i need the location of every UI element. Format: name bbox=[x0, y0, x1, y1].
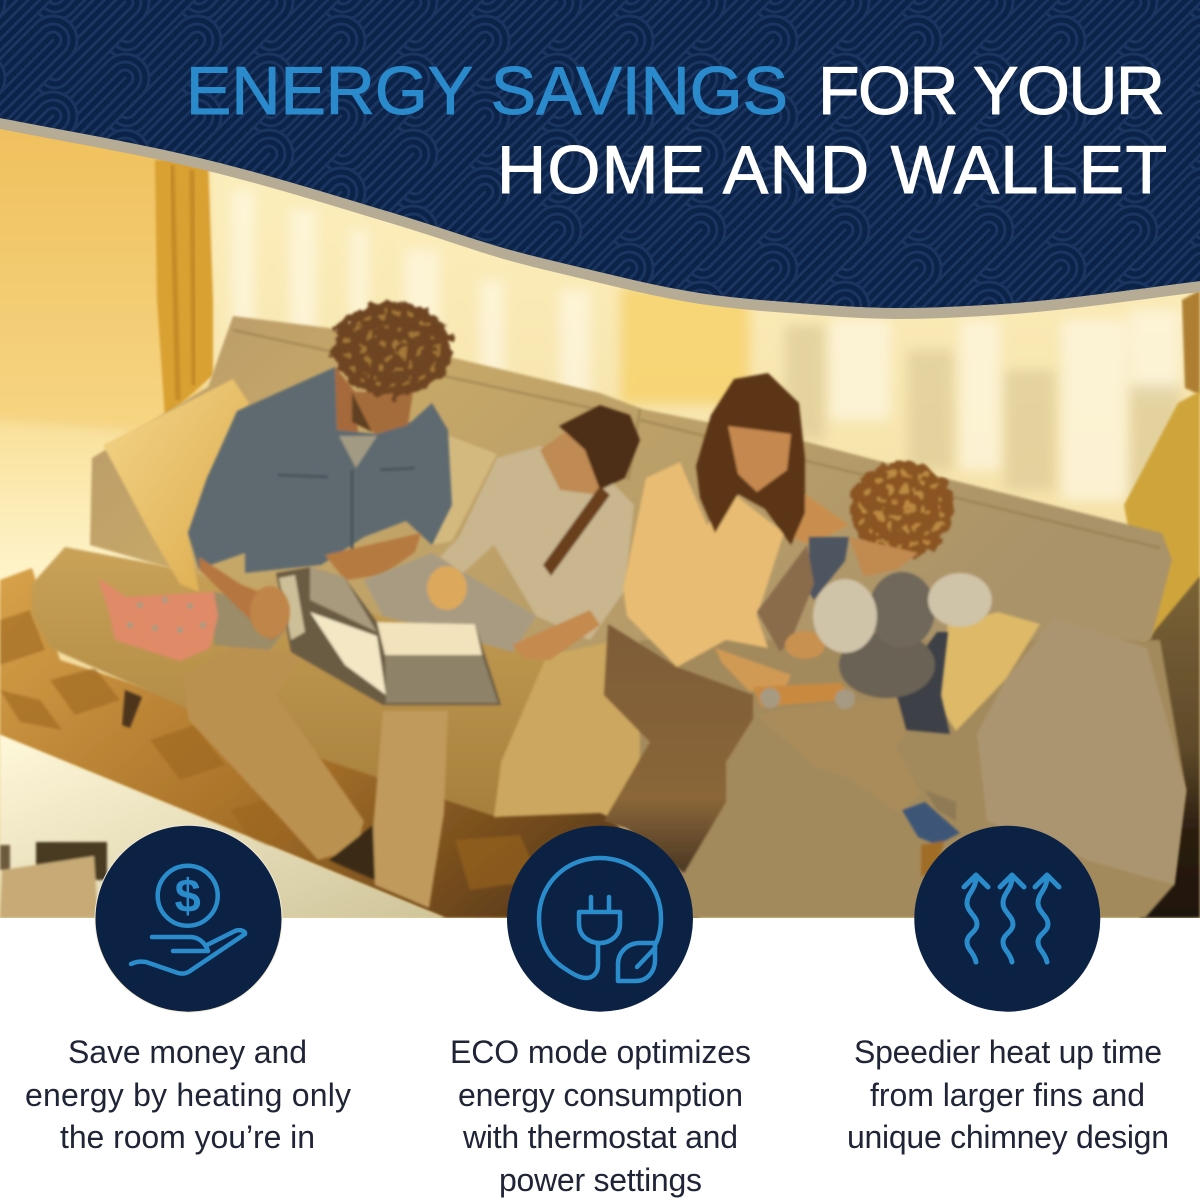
curly hair bbox=[332, 302, 452, 396]
text: speedier heat up bbox=[847, 1034, 1169, 1155]
boy's hand bbox=[785, 631, 825, 659]
girl's legs bbox=[364, 553, 536, 652]
hand bbox=[715, 648, 791, 691]
right brown and gold curtains bbox=[1182, 290, 1200, 395]
jeans bbox=[604, 624, 753, 873]
tan trousers bbox=[757, 699, 921, 813]
woman bbox=[604, 373, 849, 873]
text: ECO mode: with thermostat and bbox=[462, 1119, 738, 1155]
text: ECO mode: ECO mode optimizes bbox=[450, 1034, 751, 1070]
sofa leg bbox=[122, 690, 142, 728]
forearms and hands bbox=[199, 557, 295, 640]
pink sock bbox=[98, 578, 218, 661]
text: ECO mode: energy consumption bbox=[458, 1077, 743, 1113]
text: save money: the room you’re in bbox=[60, 1119, 315, 1155]
text: save money: Save money and bbox=[68, 1034, 307, 1070]
boy with toy koala bbox=[753, 461, 992, 877]
icon: plug with leaf bbox=[507, 826, 693, 1012]
checker floor bbox=[0, 568, 700, 918]
text: ECO mode: power settings bbox=[499, 1162, 702, 1198]
icon: rising heat arrows bbox=[914, 826, 1100, 1012]
boy's curly hair bbox=[850, 461, 954, 557]
koala body bbox=[839, 632, 935, 698]
pillow behind girl bbox=[432, 434, 497, 545]
socks and slippers bbox=[902, 802, 960, 845]
text: save money: energy by heating only bbox=[25, 1077, 351, 1113]
header banner: beige wave border bbox=[0, 0, 1200, 319]
man's shoe bbox=[329, 825, 375, 880]
blouse bbox=[623, 462, 784, 667]
girl's hair and braid bbox=[559, 405, 640, 490]
man bbox=[98, 302, 452, 908]
right sofa seat bbox=[640, 640, 1186, 918]
text: speedier heat up: from larger fins and bbox=[870, 1077, 1145, 1113]
grey trouser knee bbox=[214, 592, 300, 650]
pillow right bbox=[937, 612, 1040, 731]
pillow left bbox=[103, 379, 249, 592]
open book bbox=[276, 567, 501, 705]
jacket bbox=[809, 537, 849, 600]
right patterned fabric and dark corner bbox=[1140, 576, 1200, 918]
title: ENERGY SAVINGS bbox=[186, 53, 788, 129]
denim shirt bbox=[188, 367, 452, 573]
koala ears bbox=[813, 579, 877, 653]
sofa back bbox=[90, 316, 1172, 660]
icon: hand holding coin: $ bbox=[175, 869, 201, 922]
middle sofa cushion bbox=[494, 640, 690, 830]
girl's hands bbox=[427, 566, 467, 610]
white lower panel bbox=[0, 918, 1200, 1200]
white rug lower left bbox=[0, 735, 445, 918]
man's hand on book bbox=[250, 586, 290, 638]
photo background: wall and sheer curtains bbox=[0, 100, 1200, 930]
boy's face bbox=[849, 537, 918, 577]
man's neck bbox=[335, 367, 358, 432]
title bbox=[186, 53, 1167, 208]
sofa back seams bbox=[233, 330, 1160, 548]
books on rug bbox=[0, 842, 107, 918]
right sofa arm cushion bbox=[977, 618, 1186, 885]
toy car bbox=[753, 683, 853, 707]
girl's face bbox=[540, 425, 600, 495]
header banner: navy pattern field bbox=[0, 0, 1200, 308]
left gold curtain bbox=[155, 160, 213, 418]
text: ECO mode bbox=[450, 1034, 751, 1198]
photo: family reading on sofa in warm living room bbox=[0, 100, 1200, 930]
girl bbox=[364, 405, 640, 660]
grey tee bbox=[339, 436, 377, 468]
man's face bbox=[352, 392, 413, 434]
left sofa seat bbox=[32, 547, 560, 817]
title: HOME AND WALLET bbox=[497, 132, 1167, 208]
face bbox=[728, 426, 791, 492]
woman's arm bbox=[791, 494, 849, 545]
man's trousers bbox=[184, 644, 364, 860]
arm bbox=[757, 545, 814, 652]
text: speedier heat up: Speedier heat up time bbox=[854, 1034, 1162, 1070]
hair bbox=[696, 373, 805, 545]
title: FOR YOUR bbox=[818, 53, 1165, 129]
text: save money bbox=[25, 1034, 351, 1155]
icon: hand holding coin bbox=[94, 825, 282, 1013]
text: speedier heat up: unique chimney design bbox=[847, 1119, 1169, 1155]
girl's sweater bbox=[440, 446, 634, 640]
